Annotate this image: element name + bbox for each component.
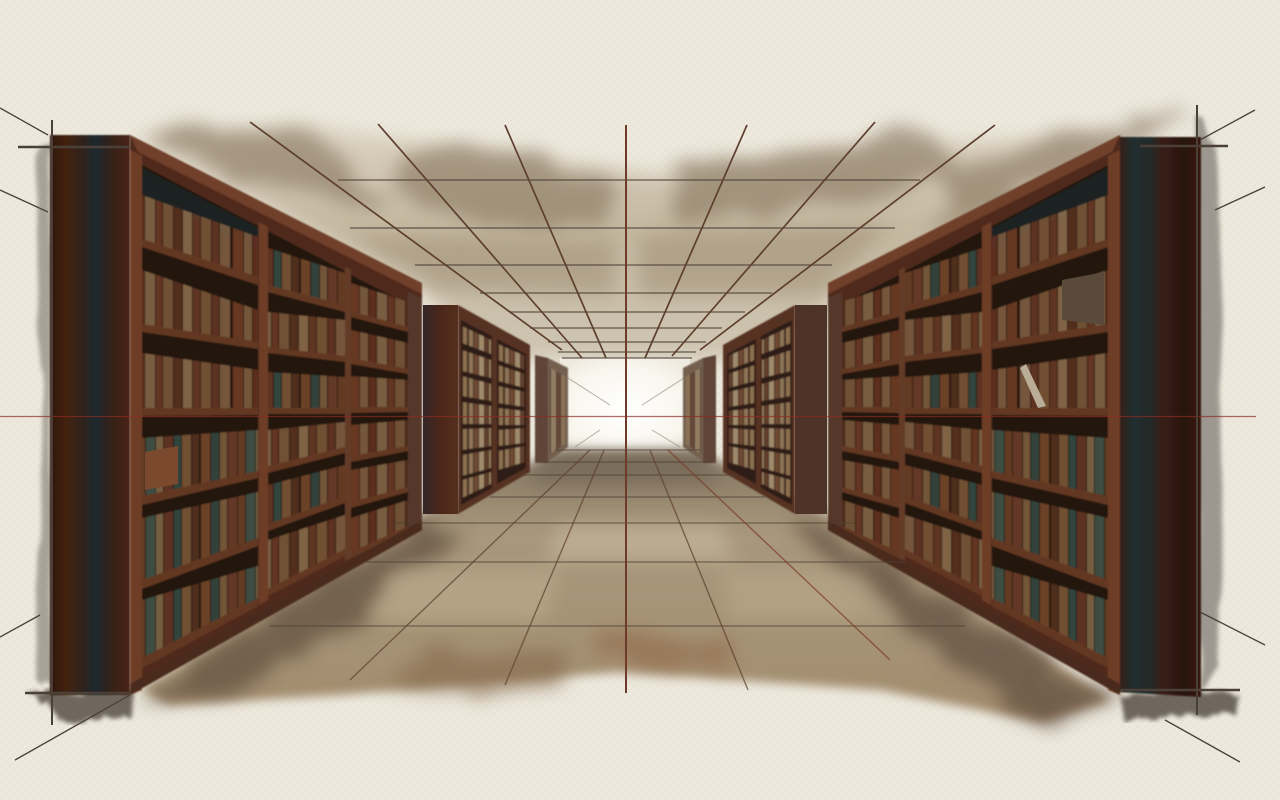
horizon line <box>0 416 1256 418</box>
leaning book on right shelf <box>1020 364 1046 408</box>
left case side post <box>50 135 130 695</box>
ceiling watercolour wash <box>130 110 1190 360</box>
floor converging lines <box>350 450 890 690</box>
left foreground bookcase <box>50 135 422 695</box>
floor cross lines <box>270 450 965 626</box>
right case side post <box>1118 137 1201 697</box>
ink brush marks behind left case <box>34 140 52 690</box>
ink brush marks behind right case <box>1198 115 1220 690</box>
stacked books on right shelf <box>1062 272 1104 325</box>
light rays at vanishing point <box>568 378 684 447</box>
back-of-aisle light <box>560 358 690 452</box>
ceiling cross lines <box>338 180 920 358</box>
floor watercolour wash <box>130 450 1120 725</box>
ceiling converging lines <box>250 122 995 358</box>
right foreground bookcase <box>828 135 1201 697</box>
ground shadow under right case <box>1118 690 1240 720</box>
far right bookcase <box>683 355 716 463</box>
stacked books on left shelf <box>145 446 178 490</box>
far left bookcase <box>535 355 568 463</box>
central vertical line <box>625 125 627 693</box>
middle left bookcase <box>423 305 530 514</box>
ground shadow under left case <box>28 690 135 722</box>
middle right bookcase <box>723 305 827 514</box>
